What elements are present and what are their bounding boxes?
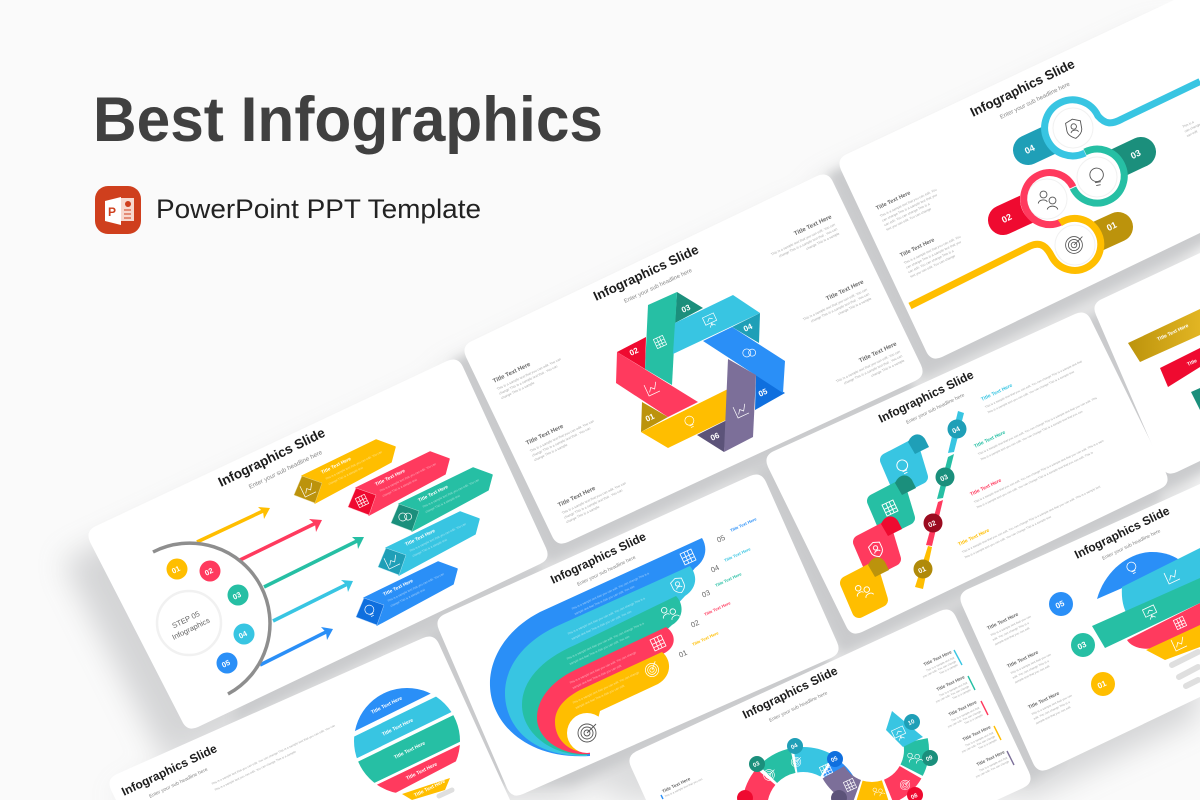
bulb icons	[1125, 561, 1187, 651]
pill numbers: 04	[1023, 143, 1036, 156]
icon: PowerPoint logo: P	[108, 205, 116, 219]
band labels	[677, 516, 758, 660]
prism banner 3: change This is a sample text	[425, 494, 461, 514]
prism banner 5: This is a sample text that you can edit. You can	[387, 572, 445, 603]
text block 2: text you can edit. You can change	[910, 254, 956, 279]
band texts: sample text that This is that you can edit.	[572, 663, 623, 690]
prism banner 5: change This is a sample text	[390, 588, 426, 608]
pill numbers: 02	[1000, 212, 1013, 225]
text block 3: Title Text Here	[1027, 691, 1061, 711]
panel: rainbow bands slide	[437, 474, 839, 796]
side text block 1	[917, 649, 959, 682]
numbered circles: 05	[220, 658, 232, 670]
left text block: This is a sample text that you can	[664, 777, 703, 798]
text block 2: edit. You can change This is a	[1012, 659, 1050, 680]
subheading: PowerPoint PPT Template: PowerPoint PPT Template	[156, 194, 481, 224]
prism banner 2: Title Text Here	[374, 468, 406, 488]
band labels: Title Text Here	[703, 600, 732, 617]
text block right 2: Title Text Here	[825, 279, 865, 302]
band texts: This is a sample text that you can edit. You can change This is a	[567, 596, 646, 636]
text block left 1: change This is a sample	[500, 381, 535, 400]
panel: stacked bars slide	[1094, 253, 1200, 474]
side text block 3: This is a sample text that	[950, 706, 980, 723]
text block left 1: change This is a sample text that . You can	[498, 364, 558, 396]
band labels: Title Text Here	[370, 695, 404, 716]
band texts: sample text that This is that you can edit. You can	[571, 609, 632, 641]
numbered circles: 03	[231, 590, 243, 602]
text block left 3: This is a sample text that you can edit. You can	[561, 481, 627, 515]
timeline: 04	[951, 426, 961, 435]
heading: Best Infographics: Best Infographics	[93, 85, 603, 155]
side text block 5: Title Text Here	[976, 749, 1006, 767]
slide subtitle: Enter your sub headline here	[905, 392, 966, 426]
arrows	[197, 507, 364, 665]
band texts: This is a sample text that you can edit. You can change	[569, 650, 637, 685]
text block 3: Title Text Here	[973, 430, 1007, 450]
text block 3: This is a sample text you can edit. You can change This is a sample text that you can	[980, 409, 1083, 462]
text block 2: This is a sample text that you can edit. You can change This is a sample text that you can edit. This is a sam	[973, 439, 1105, 504]
numbered circles: 01	[1096, 679, 1108, 691]
band texts	[566, 571, 650, 710]
numbered circles	[166, 558, 254, 674]
tile cyan	[887, 434, 929, 488]
text block right 1: change This is a sample text that . You can	[778, 227, 838, 258]
slide title: Infographics Slide	[968, 56, 1077, 120]
slide subtitle: Enter your sub headline here	[623, 268, 693, 305]
side text block 5	[970, 749, 1010, 779]
center circle: STEP 05	[170, 609, 201, 630]
band labels: 03	[700, 588, 712, 600]
band labels: Title Text Here	[729, 516, 758, 533]
slide title: Infographics Slide	[1072, 503, 1172, 562]
text block right 2: change This is a sample	[837, 296, 872, 316]
side text block 4: This is a sample text that	[964, 731, 994, 748]
side text block 5: you can edit. You can change	[975, 759, 1010, 779]
left text block: Title Text Here	[661, 776, 691, 794]
band labels: Title Text Here	[393, 740, 427, 761]
band labels: Title Text Here	[691, 630, 720, 647]
text block right 2: This is a sample text that you can edit. You can	[802, 287, 868, 322]
band texts: This is a sample text that you can edit. You can change This is a	[571, 571, 650, 611]
number pills	[1003, 135, 1141, 242]
numbered circles: 01	[170, 564, 182, 576]
text block left 3	[557, 473, 631, 524]
bulb base pills	[1172, 652, 1198, 686]
text block 1: sample text that you can edit	[994, 626, 1030, 646]
side text block 1: you can edit. You can change	[922, 659, 957, 679]
band labels: 01	[677, 648, 689, 660]
bar red	[1160, 348, 1200, 387]
band labels: Title Text Here	[405, 761, 439, 782]
slide subtitle: Enter your sub headline here	[148, 767, 209, 800]
text block 4: Title Text Here	[980, 383, 1014, 403]
side text block 2: This is a sample	[951, 688, 972, 700]
globe base	[402, 778, 450, 800]
text block right 2: change This is a sample text that . You can	[810, 292, 870, 323]
band texts: This is a sample text that you can edit. You can change	[572, 670, 640, 705]
text block left 2: change This is a sample	[533, 443, 568, 462]
slide gap shadows	[231, 16, 1200, 784]
panel: hexagon ribbon slide	[464, 174, 923, 544]
numbered circles: 04	[237, 629, 249, 641]
prism banner 2: This is a sample text that you can edit. You can	[379, 462, 437, 493]
text block right 3: This is a sample text that you can edit. You can	[835, 349, 901, 384]
text block 3: This is a	[1182, 120, 1195, 129]
prism banner 4	[378, 512, 479, 575]
gray semicircle	[153, 543, 270, 694]
band texts: sample text that This is that you can edit. You can	[574, 584, 635, 616]
ribbon numbers: 01	[644, 412, 656, 424]
band icons	[643, 549, 696, 679]
target circle	[567, 713, 607, 753]
text block 2	[899, 226, 968, 279]
text block 3: sample text that you can edit	[1035, 705, 1071, 725]
globe bands	[354, 688, 460, 793]
text block right 1: change This is a sample	[805, 231, 840, 251]
numbered circles	[1049, 592, 1115, 696]
side text block 1: This is a sample text that	[925, 656, 955, 673]
side text block 1: This is a sample	[938, 663, 959, 675]
prism banner 1: This is a sample text that you can edit. You can	[325, 450, 383, 481]
ribbon numbers: 02	[628, 346, 640, 358]
text block 3	[1182, 118, 1200, 138]
slide subtitle: Enter your sub headline here	[999, 81, 1072, 121]
text block left 2: change This is a sample text that . You can	[531, 426, 591, 458]
pill numbers: 03	[1129, 148, 1142, 161]
text block 2: This is a sample text you can edit. You can change This is a sample text that you can edit. This is	[976, 450, 1094, 510]
snake segments	[742, 711, 923, 800]
panel: arrows slide	[88, 359, 548, 729]
snake icons	[764, 726, 923, 798]
text lines: This is a sample text that you can edit. You can change This is a sample text that you can edit. You can	[211, 723, 336, 786]
text block 1: edit. You can change This is a	[992, 621, 1030, 642]
bar teal	[1191, 388, 1200, 410]
side text block 3	[942, 699, 984, 732]
snake badges: 03	[752, 761, 761, 769]
text block 2: Title Text Here	[969, 478, 1003, 498]
slide subtitle: Enter your sub headline here	[1101, 528, 1162, 562]
side text block 3: you can edit. You can change	[947, 709, 982, 729]
timeline: 03	[939, 474, 949, 483]
side text block 2: This is a sample text that	[938, 681, 968, 698]
text block 2: sample text that you can edit	[1014, 664, 1050, 684]
timeline: 02	[927, 520, 937, 529]
band labels: Title Text Here	[714, 571, 743, 588]
text block 1: This is a sample text you can edit. You can change This is a sample text	[964, 515, 1052, 560]
tile teal	[874, 475, 916, 529]
timeline: 01	[917, 566, 927, 575]
text block 3: can edit	[1186, 129, 1198, 138]
slide subtitle: Enter your sub headline here	[576, 555, 637, 588]
panel: ribbon tiles slide	[766, 312, 1168, 634]
center circle	[157, 591, 221, 655]
text block right 1	[766, 214, 841, 266]
text block right 3	[831, 341, 906, 393]
prism banner 2: change This is a sample text	[382, 478, 418, 498]
slide title: Infographics Slide	[119, 741, 219, 799]
text block right 1: Title Text Here	[793, 214, 833, 237]
text block 3: This is a sample text that you can edit. You can change This is a sample text that you can edit. This	[977, 396, 1098, 456]
text block 4: This is a sample text that you can edit. You can change This is a sample text that	[984, 359, 1083, 409]
text block 2: can change This is a sample text that you	[905, 240, 962, 270]
prism banner 5	[356, 562, 457, 625]
snake badges: 05	[830, 756, 839, 764]
text block 1: can change This is a sample text that you	[881, 193, 938, 223]
band labels: Title Text Here	[723, 546, 752, 563]
band labels: 04	[709, 563, 721, 575]
text block 1	[986, 607, 1036, 646]
slide title: Infographics Slide	[876, 367, 976, 426]
base pill	[439, 790, 452, 796]
text block left 3: change This is a sample	[565, 505, 600, 524]
text block 1: This is a sample text that you can edit. You can change This is a sample text that you can edit. This is a sample text	[961, 485, 1101, 554]
connected line	[910, 82, 1200, 306]
bulb bands	[1092, 548, 1200, 660]
tile red	[860, 516, 902, 570]
slide title: Infographics Slide	[216, 425, 328, 490]
rainbow bands	[490, 538, 705, 756]
bar gold: Title Text Here	[1156, 323, 1190, 343]
panel: snake process slide	[629, 609, 1031, 800]
text block left 3: Title Text Here	[557, 486, 597, 509]
side text block 2: Title Text Here	[936, 674, 966, 692]
prism banner 4: change This is a sample text	[412, 538, 448, 558]
ribbon icons	[644, 313, 757, 429]
tile yellow	[847, 557, 889, 611]
text block 4: This is a sample text you can edit. You can change This is a sample text	[987, 370, 1075, 415]
text block 2: can edit. You can change This is a	[907, 249, 954, 274]
band labels: 05	[715, 533, 727, 545]
text block right 3: change This is a sample	[870, 358, 905, 378]
hexagon ribbon	[616, 292, 785, 452]
prism banner 5: Title Text Here	[382, 578, 414, 598]
text block 2	[1006, 645, 1056, 684]
text lines: This is a sample text you can edit. You can change This is a sample	[214, 749, 297, 792]
side text block 3: This is a sample	[963, 713, 984, 725]
text block right 1: This is a sample text that you can edit. You can	[770, 222, 836, 257]
text block 2: Title Text Here	[1006, 650, 1040, 670]
text block 2: Title Text Here	[899, 237, 936, 259]
text block 3	[1027, 686, 1077, 725]
ribbon numbers: 06	[709, 431, 721, 443]
circle icons	[1038, 118, 1105, 253]
text block right 3: change This is a sample text that . You can	[843, 354, 903, 385]
ribbon numbers: 03	[680, 303, 692, 315]
snake badges: 10	[907, 719, 916, 727]
prism banner 1	[294, 440, 395, 503]
text block 1	[875, 179, 944, 232]
side text block 4: Title Text Here	[962, 724, 992, 742]
slide title: Infographics Slide	[740, 663, 840, 722]
prism banner 4: Title Text Here	[404, 528, 436, 548]
text block 1: Title Text Here	[875, 190, 912, 212]
text block right 3: Title Text Here	[858, 341, 898, 364]
text block 2: This is a sample text that you can edit. You	[903, 235, 961, 265]
side text block 4: This is a sample	[977, 738, 998, 750]
bar red: Title	[1186, 358, 1198, 368]
prism banner 3	[391, 468, 492, 531]
snake badges	[737, 714, 938, 800]
pill numbers	[1000, 143, 1142, 233]
band texts: sample text that This is that you can edit.	[575, 683, 626, 710]
numbered circles: 03	[1076, 640, 1088, 652]
panel: linked circles slide	[839, 0, 1200, 359]
band labels: Title Text Here	[381, 717, 415, 738]
prism banner 4: This is a sample text that you can edit. You can	[409, 522, 467, 553]
prism banner 2	[348, 452, 449, 515]
text block 1: text you can edit. You can change	[886, 207, 932, 232]
side text block 3: Title Text Here	[948, 699, 978, 717]
text block left 2: Title Text Here	[525, 424, 565, 447]
side text block 4: you can edit. You can change	[961, 734, 996, 754]
slide title: Infographics Slide	[548, 529, 648, 587]
pill numbers: 01	[1105, 220, 1118, 233]
text block left 3: change This is a sample text that . You can	[563, 488, 623, 520]
text block 1: can edit. You can change This is a	[883, 202, 930, 227]
text block 1: Title Text Here	[986, 612, 1020, 632]
side text block 4	[956, 724, 998, 757]
snake badges: 04	[790, 743, 799, 751]
prism banner 1: change This is a sample text	[328, 466, 364, 486]
slide subtitle: Enter your sub headline here	[768, 690, 829, 724]
numbered circles: 05	[1054, 599, 1066, 611]
prism banner 3: Title Text Here	[417, 484, 449, 504]
slide subtitle: Enter your sub headline here	[248, 449, 324, 491]
panel: globe bands slide	[109, 636, 510, 800]
slide title: Infographics Slide	[591, 242, 701, 304]
text block right 2	[798, 279, 873, 331]
band texts: This is a sample text that you can edit. You can change This is a	[566, 621, 645, 661]
text block left 1: This is a sample text that you can edit. You can	[496, 357, 562, 391]
side text block 5: This is a sample text that	[978, 756, 1008, 773]
text block left 1: Title Text Here	[492, 362, 532, 385]
side text block 2	[930, 674, 972, 707]
ribbon numbers: 04	[742, 322, 754, 334]
text block left 2: This is a sample text that you can edit. You can	[529, 419, 595, 453]
side text block 2: you can edit. You can change	[935, 684, 970, 704]
circle backs	[1020, 101, 1124, 272]
bar gold	[1128, 309, 1200, 362]
side colour bars	[661, 650, 1014, 799]
band labels: Title Text Here	[413, 778, 447, 799]
text block 2: This is a sample text that you can	[1010, 652, 1052, 675]
panel: lightbulb bands slide	[960, 484, 1200, 771]
inner circles	[1027, 108, 1117, 265]
text block 3: This is a sample text that you can	[1031, 693, 1073, 716]
text block left 2	[525, 411, 599, 462]
band labels	[370, 695, 447, 799]
side text block 1: Title Text Here	[923, 649, 953, 667]
text block 1: This is a sample text that you can	[990, 614, 1032, 637]
center circle: Infographics	[171, 616, 211, 642]
text block left 1	[492, 349, 566, 400]
prism banner 3: This is a sample text that you can edit. You can	[422, 478, 480, 509]
prism banner 1: Title Text Here	[320, 456, 352, 476]
band labels: 02	[689, 618, 701, 630]
text block 1: Title Text Here	[957, 528, 991, 548]
text block 1: This is a sample text that you can edit. You	[879, 188, 937, 218]
ribbon numbers: 05	[757, 387, 769, 399]
text block 3: edit. You can change This is a	[1033, 700, 1071, 721]
ribbon numbers	[628, 303, 769, 443]
snake badges: 09	[925, 755, 934, 763]
band texts: sample text that This is that you can edit. You can	[569, 634, 630, 666]
icon: PowerPoint logo	[95, 186, 141, 234]
numbered circles: 02	[203, 566, 215, 578]
timeline	[914, 411, 966, 589]
